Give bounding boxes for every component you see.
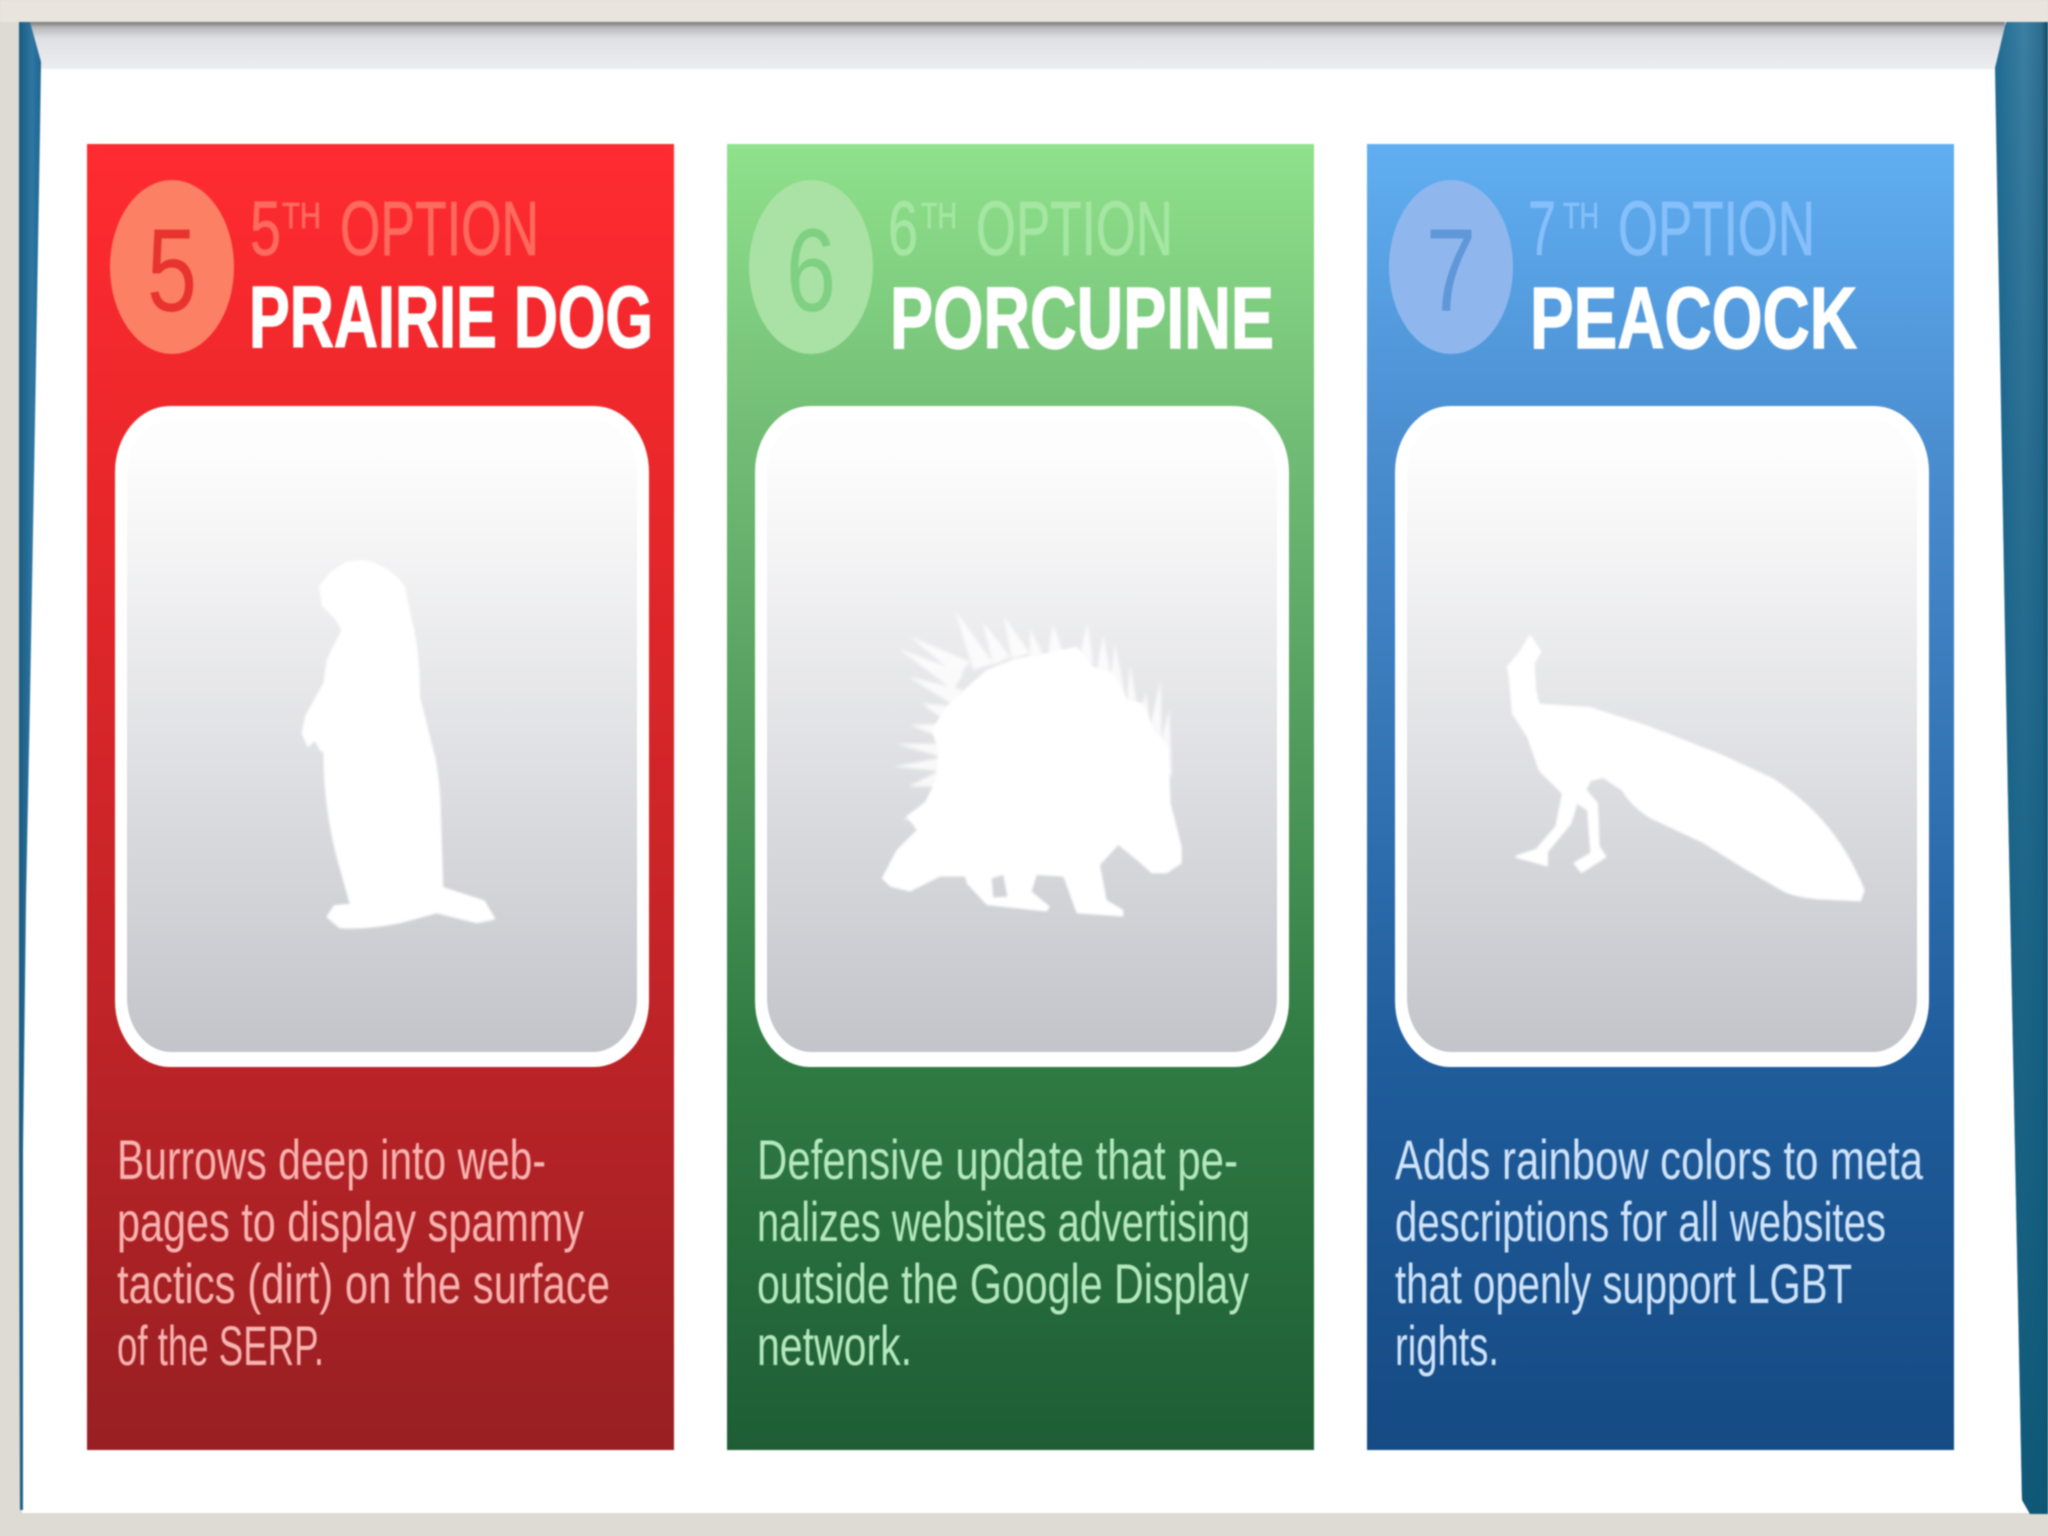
- icon: prairie dog silhouette: [303, 562, 493, 927]
- number badge 5: 5: [147, 205, 197, 337]
- option label 6th: TH: [921, 195, 957, 236]
- image card: [755, 406, 1289, 1067]
- option label 6th: OPTION: [976, 186, 1173, 272]
- image card: [115, 406, 649, 1067]
- heading: prairie dog: PRAIRIE DOG: [249, 269, 653, 366]
- description text: rights.: [1395, 1314, 1499, 1377]
- number badge 7: [1389, 180, 1513, 354]
- description text: Defensive update that pe-: [757, 1128, 1238, 1191]
- number badge 6: [749, 180, 873, 354]
- description text: nalizes websites advertising: [757, 1190, 1250, 1253]
- description text: [117, 1128, 610, 1377]
- option label 7th: [1528, 186, 1815, 272]
- description text: tactics (dirt) on the surface: [117, 1252, 610, 1315]
- number badge 7: 7: [1426, 205, 1476, 337]
- description text: [757, 1128, 1250, 1377]
- option label 5th: OPTION: [340, 186, 539, 272]
- left blue frame bar: [19, 22, 41, 1510]
- option label 7th: OPTION: [1618, 186, 1815, 272]
- option label 6th: 6: [888, 186, 918, 272]
- description text: pages to display spammy: [117, 1190, 584, 1253]
- panel: prairie dog: [87, 144, 674, 1450]
- description text: network.: [757, 1314, 912, 1377]
- description text: of the SERP.: [117, 1314, 324, 1377]
- description text: [1395, 1128, 1924, 1377]
- option label 6th: [888, 186, 1173, 272]
- image card: [1395, 406, 1929, 1067]
- panel: porcupine: [727, 144, 1314, 1450]
- icon: peacock silhouette: [1508, 637, 1863, 900]
- panel background red: [87, 144, 674, 1450]
- option label 7th: TH: [1563, 195, 1599, 236]
- option label 5th: [250, 186, 539, 272]
- number badge 5: [110, 180, 234, 354]
- description text: outside the Google Display: [757, 1252, 1249, 1315]
- panel: peacock: [1367, 144, 1954, 1450]
- top grey bevel band: [30, 22, 2005, 69]
- top beige edge: [0, 0, 2048, 22]
- number badge 6: 6: [786, 205, 836, 337]
- option label 5th: TH: [282, 195, 321, 236]
- heading: peacock: PEACOCK: [1530, 270, 1857, 367]
- panel background green: [727, 144, 1314, 1450]
- heading: porcupine: PORCUPINE: [890, 270, 1274, 367]
- description text: that openly support LGBT: [1395, 1252, 1852, 1315]
- description text: Burrows deep into web-: [117, 1128, 546, 1191]
- option label 5th: 5: [250, 186, 281, 272]
- right blue frame bar: [1995, 22, 2048, 1514]
- option label 7th: 7: [1528, 186, 1556, 272]
- panel background blue: [1367, 144, 1954, 1450]
- icon: porcupine silhouette: [882, 610, 1182, 917]
